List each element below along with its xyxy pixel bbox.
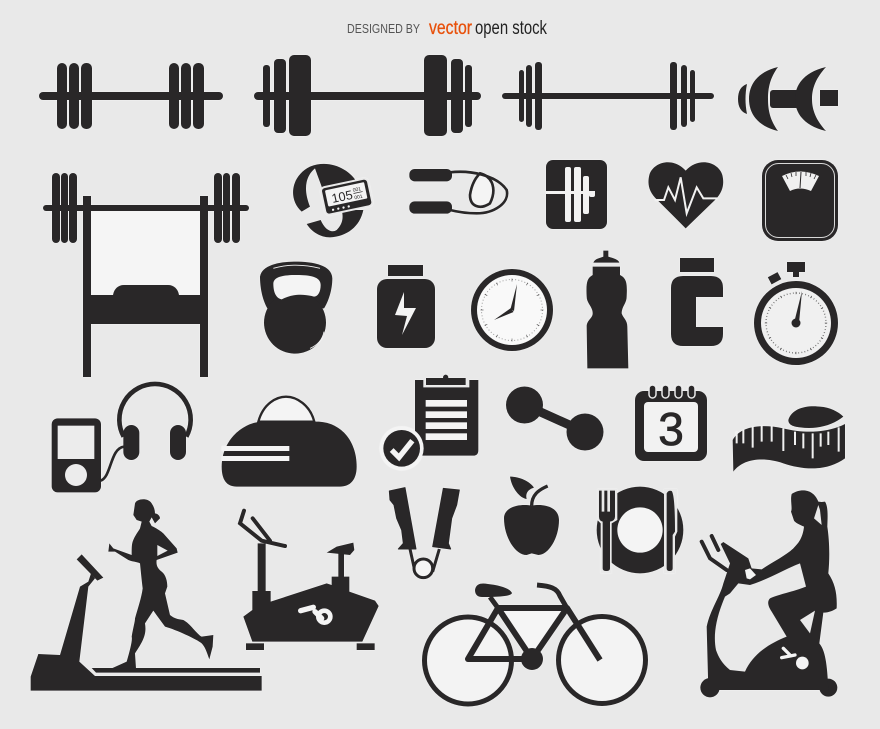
icon: hand gripper	[389, 488, 459, 578]
header credit: DESIGNED BY	[347, 21, 420, 36]
icon: barbell 3	[502, 62, 714, 130]
icon: kettlebell	[260, 262, 332, 354]
header credit	[347, 18, 547, 39]
header credit: open stock	[475, 18, 547, 39]
icon: bench press	[43, 173, 249, 377]
icon: clipboard with checkmark	[380, 375, 478, 470]
icon: mp3 player and headphones	[52, 384, 191, 492]
icon: smartwatch	[293, 164, 373, 237]
icon: bathroom scale	[762, 160, 838, 241]
icon: diagonal dumbbell	[506, 386, 604, 450]
icon: runner on treadmill	[31, 499, 262, 691]
icon: supplement jar with lightning	[377, 265, 435, 348]
icon: smartwatch: 001	[354, 194, 364, 201]
icon: water bottle	[586, 251, 628, 368]
icon: smartwatch: 105	[330, 188, 354, 206]
icon: bicycle	[424, 584, 646, 704]
icon: woman on exercise bike	[700, 490, 837, 697]
icon: barbell 1	[39, 63, 223, 129]
icon: barbell 2	[254, 55, 481, 136]
treadmill	[31, 554, 262, 691]
icon: square barbell tile	[546, 160, 607, 229]
icon: calendar	[635, 385, 707, 461]
icon: exercise bike	[240, 511, 379, 650]
icon: measuring tape	[733, 406, 845, 472]
icon: stopwatch	[754, 262, 838, 365]
icon: apple	[504, 477, 559, 555]
icon: gym bag	[222, 397, 357, 487]
icon: calendar: 3	[658, 403, 684, 455]
icon: plate with cutlery	[597, 487, 683, 573]
runner silhouette	[108, 499, 213, 668]
icon: heart with pulse	[648, 162, 723, 228]
arm gap	[157, 545, 168, 556]
header credit: vector	[429, 18, 473, 39]
icon: protein jar	[671, 258, 723, 346]
icon: smartwatch: 001	[352, 186, 362, 194]
icon: jump rope	[409, 169, 507, 214]
icon: wall clock	[471, 269, 553, 351]
icon: crescent dumbbell	[738, 67, 838, 131]
